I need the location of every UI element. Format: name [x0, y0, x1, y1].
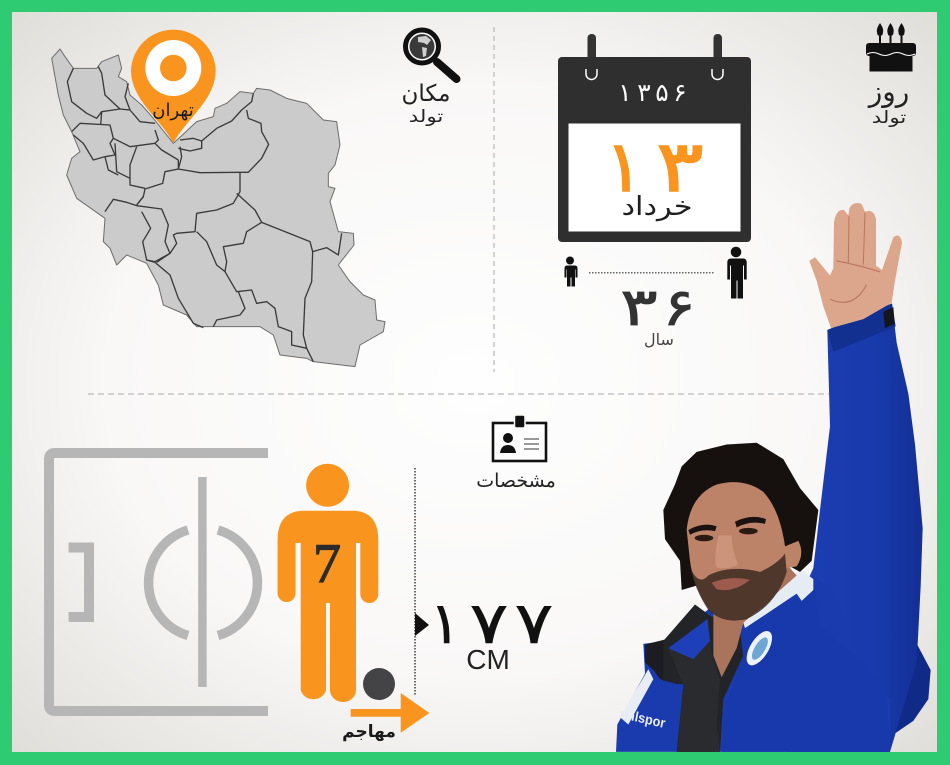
finger lines: [830, 213, 880, 302]
age: [620, 277, 696, 349]
map of Iran with provinces: [52, 49, 385, 367]
ball: [363, 668, 395, 700]
heading: birthplace: مکان: [402, 81, 450, 107]
height value: ۷: [515, 590, 553, 657]
heading: birthday: تولد: [872, 107, 906, 127]
icon: tall person: [727, 247, 747, 298]
heading: birthplace: تولد: [409, 106, 443, 126]
height value: [429, 589, 553, 675]
nose: [715, 535, 738, 568]
icon: ID card: [493, 415, 546, 461]
white collar: [743, 569, 813, 628]
heading: birthday: روز: [867, 75, 909, 108]
photo: player waving: [616, 203, 931, 752]
raised arm: [787, 303, 923, 752]
map pin: Tehran: تهران: [152, 100, 194, 121]
age: سال: [644, 330, 674, 349]
age: ۳: [620, 277, 658, 338]
lips: [712, 578, 750, 590]
white shoulder stripe: [620, 669, 653, 725]
calendar year: [618, 78, 687, 107]
height marker: [415, 468, 429, 695]
neck: [713, 565, 797, 677]
calendar year: ۱: [618, 78, 632, 107]
heading: birthplace: [402, 81, 450, 126]
position label: مهاجم: [342, 722, 396, 742]
jacket body: [616, 577, 890, 752]
far side of jacket: [867, 637, 931, 739]
football pitch: [49, 453, 268, 711]
player figure: [278, 464, 378, 702]
beard: [691, 554, 787, 621]
front panel: [722, 586, 890, 752]
heading: birthday: [867, 75, 909, 127]
club badge: [741, 626, 778, 671]
shirt number: 7: [313, 533, 341, 595]
face: [687, 482, 801, 620]
height value: ۱: [429, 589, 461, 657]
calendar year: ۵: [655, 78, 669, 107]
calendar month: خرداد: [621, 191, 693, 221]
hair back: [663, 443, 818, 590]
map pin: Tehran: [131, 30, 216, 143]
calendar day: ۱: [605, 125, 643, 208]
age: ۶: [662, 277, 696, 338]
brows and eyes: [688, 517, 766, 541]
calendar: [558, 34, 751, 242]
calendar year: ۳: [637, 78, 651, 107]
heading: specifications: مشخصات: [476, 470, 556, 492]
hand: [809, 203, 902, 328]
icon: birthday cake: [866, 23, 916, 72]
icon: magnifier with globe: [406, 30, 456, 79]
dark hood: [645, 639, 687, 685]
height value: CM: [466, 644, 510, 675]
calendar day: ۳: [656, 125, 704, 208]
sleeve cuff: [827, 303, 896, 352]
position arrow: [351, 693, 429, 733]
calendar year: ۶: [673, 78, 687, 107]
sponsor text on sleeve: uhlspor: [618, 705, 667, 731]
dark inner collar and shirt: [663, 605, 745, 752]
height value: ۷: [470, 590, 508, 657]
calendar day: [605, 125, 704, 208]
icon: small person: [564, 256, 578, 286]
